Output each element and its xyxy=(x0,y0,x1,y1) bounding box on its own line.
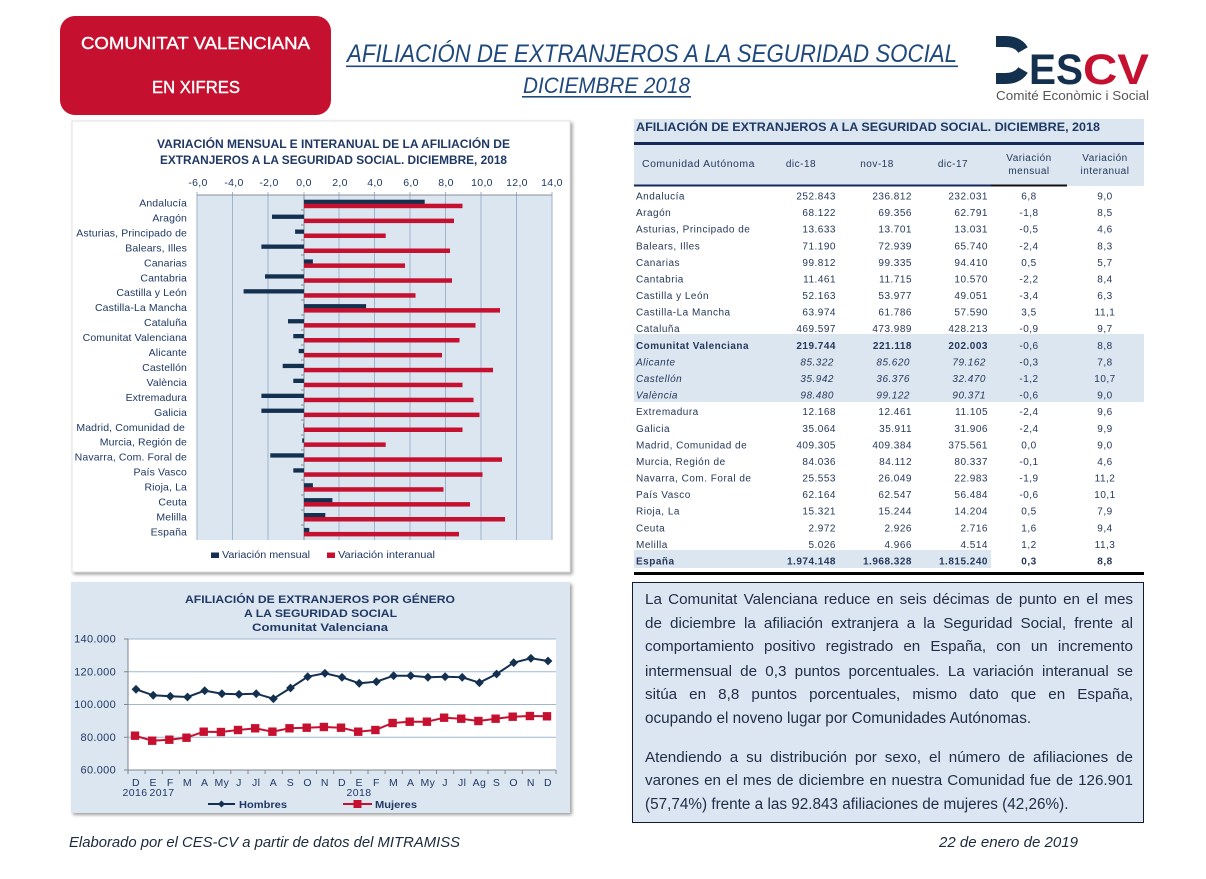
line chart x axis labels: J xyxy=(442,777,448,789)
badge: Comunitat Valenciana en xifres: EN XIFRES xyxy=(152,77,240,97)
bar chart legend: Variación mensual xyxy=(222,549,310,561)
table rows: Castilla-La Mancha xyxy=(636,308,731,319)
line chart x axis labels: F xyxy=(373,777,380,789)
line chart x axis labels: D xyxy=(544,777,552,789)
line chart x axis labels: J xyxy=(236,777,242,789)
table rows: 428.213 xyxy=(948,324,988,335)
table rows: Aragón xyxy=(636,208,671,219)
line chart x axis labels: 2016 xyxy=(123,787,147,799)
panel: bar chart of monthly and yearly variation xyxy=(72,121,570,572)
table rows: 13.633 xyxy=(802,225,836,236)
table rows: 62.547 xyxy=(878,490,912,501)
table rows: 1,2 xyxy=(1021,540,1037,551)
table rows: 65.740 xyxy=(954,241,988,252)
line chart x axis labels: Ag xyxy=(473,777,486,789)
table rows: 56.484 xyxy=(954,490,988,501)
bar chart plot area xyxy=(197,195,552,540)
table rows: 68.122 xyxy=(802,208,836,219)
bar chart category labels: Ceuta xyxy=(158,496,187,508)
table rows: -0,6 xyxy=(1019,490,1039,501)
table rows: 409.305 xyxy=(796,440,836,451)
line chart x axis labels: Jl xyxy=(252,777,260,789)
table rows: 1,6 xyxy=(1021,523,1037,534)
table rows: Ceuta xyxy=(636,523,665,534)
line chart x axis labels: O xyxy=(509,777,518,789)
table rows: 72.939 xyxy=(878,241,912,252)
line chart legend: Hombres xyxy=(239,800,287,811)
table rows: Cataluña xyxy=(636,324,680,335)
text box: commentary: (57,74%) frente a las 92.843 afiliaciones de mujeres (42,26%). xyxy=(645,796,1068,813)
table rows: Galicia xyxy=(636,424,670,435)
table rows: 6,8 xyxy=(1021,192,1037,202)
table rows: Andalucía xyxy=(636,192,685,202)
line: Hombres xyxy=(136,658,548,699)
bar chart category labels: Navarra, Com. Foral de xyxy=(75,452,187,464)
line chart title: Comunitat Valenciana xyxy=(252,622,389,634)
table rows: 10,7 xyxy=(1094,374,1116,385)
table title: AFILIACIÓN DE EXTRANJEROS A LA SEGURIDAD SOCIAL. DICIEMBRE, 2018 xyxy=(636,121,1101,134)
bar chart category labels: Castilla y León xyxy=(116,287,187,299)
line chart y axis labels: 120.000 xyxy=(74,666,116,678)
table header: Comunidad Autónoma xyxy=(642,159,755,170)
table rows: 4,6 xyxy=(1097,225,1113,236)
table rows: 26.049 xyxy=(878,474,912,484)
bars: monthly variation xyxy=(244,200,425,532)
highlight band: Comunitat Valenciana and provinces xyxy=(634,334,1144,402)
badge: Comunitat Valenciana en xifres xyxy=(60,16,331,115)
table rows: 252.843 xyxy=(796,192,836,202)
bar chart x axis labels: -6,0 xyxy=(188,177,208,189)
line chart title: AFILIACIÓN DE EXTRANJEROS POR GÉNERO xyxy=(185,593,455,606)
bar chart category labels: Castellón xyxy=(142,362,187,374)
table rows: 236.812 xyxy=(872,192,912,202)
table rows: -0,6 xyxy=(1019,341,1039,352)
bar chart category labels: España xyxy=(151,526,187,538)
main title: AFILIACIÓN DE EXTRANJEROS A LA SEGURIDAD SOCIAL xyxy=(345,39,957,68)
table header: dic-17 xyxy=(938,159,968,170)
table rows: -0,3 xyxy=(1019,357,1039,368)
table rows: 15.321 xyxy=(802,507,836,518)
line chart y axis labels: 140.000 xyxy=(74,634,116,646)
table bottom rule xyxy=(634,572,1144,575)
bar chart legend: Variación interanual xyxy=(338,549,435,561)
line chart x axis labels: F xyxy=(167,777,174,789)
table rows: -2,2 xyxy=(1019,274,1039,286)
table rows: 9,0 xyxy=(1097,440,1113,451)
table rows: 2.926 xyxy=(884,523,912,534)
line chart x axis labels: S xyxy=(287,777,294,789)
bar chart x axis labels: 12,0 xyxy=(506,177,528,189)
bar chart category labels: Murcia, Región de xyxy=(100,437,187,449)
highlight band: España xyxy=(634,550,991,568)
table rows: -1,8 xyxy=(1019,208,1039,219)
bar chart title: EXTRANJEROS A LA SEGURIDAD SOCIAL. DICIEMBRE, 2018 xyxy=(160,155,508,167)
table rows: -0,1 xyxy=(1019,457,1039,468)
table rows: 12.461 xyxy=(878,407,912,418)
table header: mensual xyxy=(1008,166,1050,177)
table rows: 52.163 xyxy=(802,291,836,302)
table rows: 8,8 xyxy=(1097,341,1113,352)
table header: Variación xyxy=(1006,153,1052,164)
bar chart category labels: Extremadura xyxy=(126,392,187,404)
table rows: Melilla xyxy=(636,540,668,551)
table rows: 4.514 xyxy=(960,540,988,551)
bar chart x axis labels: -2,0 xyxy=(259,177,279,189)
text box: commentary: Atendiendo a su distribución por sexo, el número de afiliaciones de xyxy=(645,748,1133,766)
bar chart category labels: Balears, Illes xyxy=(125,242,187,254)
table rows: Alicante xyxy=(635,357,676,368)
bar chart category labels xyxy=(75,198,187,538)
text box: commentary xyxy=(632,582,1144,823)
table rows: 11.105 xyxy=(955,407,988,418)
main title: DICIEMBRE 2018 xyxy=(523,73,691,98)
table header: interanual xyxy=(1081,166,1129,177)
table rows: 53.977 xyxy=(878,291,912,302)
table rows: 36.376 xyxy=(876,374,910,385)
bars: yearly variation xyxy=(304,204,505,536)
table rows: 22.983 xyxy=(954,474,988,484)
table rows: 8,8 xyxy=(1097,556,1113,568)
table rows: Cantabria xyxy=(636,274,684,286)
line chart title xyxy=(185,593,455,634)
table rows: 9,9 xyxy=(1097,424,1113,435)
table rows: 11,1 xyxy=(1095,308,1115,319)
table rows: 10.570 xyxy=(954,274,988,286)
table rows: 9,7 xyxy=(1097,324,1113,335)
line chart y axis labels: 60.000 xyxy=(81,764,116,776)
table rows: 62.791 xyxy=(954,208,988,219)
table header: Variación xyxy=(1082,153,1128,164)
table rows: 9,0 xyxy=(1097,391,1113,402)
table rows: 35.942 xyxy=(800,374,834,385)
table rows: Castilla y León xyxy=(636,291,709,302)
table rows: 63.974 xyxy=(802,308,836,319)
logo: CES-CV: ES xyxy=(1029,46,1083,94)
line chart x axis labels: N xyxy=(321,777,329,789)
table rows: España xyxy=(636,556,675,568)
bar chart x axis labels: -4,0 xyxy=(224,177,244,189)
table rows: 0,5 xyxy=(1021,507,1037,518)
line chart legend: Mujeres xyxy=(375,800,417,811)
table rows: 1.968.328 xyxy=(863,556,912,568)
bar chart x axis labels: 6,0 xyxy=(403,177,419,189)
table rows: 94.410 xyxy=(954,258,988,269)
footer: date: 22 de enero de 2019 xyxy=(938,835,1078,851)
table rows: 219.744 xyxy=(796,341,836,352)
table rows: 69.356 xyxy=(878,208,912,219)
line chart y axis labels: 100.000 xyxy=(74,699,116,711)
table rows: 79.162 xyxy=(952,357,986,368)
line chart x axis labels: E xyxy=(149,777,157,789)
bar chart category labels: Melilla xyxy=(156,512,187,524)
bar chart category labels: Madrid, Comunidad de xyxy=(76,422,185,434)
table rows: Castellón xyxy=(636,374,682,385)
line chart x axis labels: D xyxy=(338,777,346,789)
bar chart x axis labels: 14,0 xyxy=(541,177,563,189)
table rows: 10,1 xyxy=(1094,490,1116,501)
table rows: 6,3 xyxy=(1097,291,1113,302)
table rows: 469.597 xyxy=(796,324,836,335)
table rows: 1.815.240 xyxy=(939,556,988,568)
table rows: -3,4 xyxy=(1019,291,1039,302)
line chart x axis labels: M xyxy=(183,777,192,789)
table title xyxy=(634,119,1144,142)
table rows: 0,3 xyxy=(1021,556,1037,568)
bar chart category labels: País Vasco xyxy=(133,467,187,479)
table rows: 11,3 xyxy=(1095,540,1115,551)
main title xyxy=(345,39,958,98)
bar chart category labels: Cantabria xyxy=(140,272,187,284)
table rows: 99.335 xyxy=(878,258,912,269)
line: Mujeres xyxy=(135,716,547,741)
line chart legend xyxy=(208,800,417,811)
table rows: 375.561 xyxy=(948,440,988,451)
table rows: 84.112 xyxy=(879,457,912,468)
table rows: 7,9 xyxy=(1097,507,1113,518)
bar chart category labels: Andalucía xyxy=(139,198,187,210)
table rows: -0,9 xyxy=(1019,324,1039,335)
line chart x axis labels: 2017 xyxy=(150,787,174,799)
table rows: 98.480 xyxy=(800,391,834,402)
bar chart category labels: Aragón xyxy=(152,212,187,224)
table rows: Asturias, Principado de xyxy=(636,225,750,236)
table rows: Extremadura xyxy=(636,407,699,418)
table rows: Balears, Illes xyxy=(636,241,700,252)
table rows: 61.786 xyxy=(878,308,912,319)
line chart y axis labels xyxy=(74,634,116,776)
table rows: 8,5 xyxy=(1097,208,1113,219)
table rows: 14.204 xyxy=(954,507,988,518)
table rows: -2,4 xyxy=(1019,241,1039,252)
table rows: Canarias xyxy=(636,258,680,269)
table rows: 11,2 xyxy=(1095,474,1115,484)
bar chart category labels: València xyxy=(147,377,187,389)
logo: CES-CV xyxy=(996,42,1149,103)
table rows: València xyxy=(636,391,678,402)
bar chart category labels: Comunitat Valenciana xyxy=(83,332,187,344)
table rows: 9,0 xyxy=(1097,192,1113,202)
table header: dic-18 xyxy=(786,159,816,170)
table header xyxy=(634,142,1144,186)
line chart x axis labels: A xyxy=(270,777,277,789)
table rows: 99.122 xyxy=(876,391,910,402)
text box: commentary: sitúa en 8,8 puntos porcentuales, mismo dato que en España, xyxy=(645,686,1133,703)
bar chart x axis labels xyxy=(188,177,563,189)
table rows: 4,6 xyxy=(1097,457,1113,468)
text box: commentary: ocupando el noveno lugar por Comunidades Autónomas. xyxy=(645,710,1031,727)
bar chart x axis labels: 2,0 xyxy=(332,177,348,189)
line chart x axis labels: My xyxy=(421,777,436,789)
line chart y axis labels: 80.000 xyxy=(81,732,116,744)
line chart x axis labels xyxy=(123,777,552,799)
table rows: 0,0 xyxy=(1021,440,1037,451)
table rows: 5.026 xyxy=(808,540,836,551)
table rows: 473.989 xyxy=(872,324,912,335)
bar chart category labels: Asturias, Principado de xyxy=(76,227,187,239)
line chart x axis labels: A xyxy=(201,777,208,789)
table rows: Madrid, Comunidad de xyxy=(636,440,747,451)
bar chart legend xyxy=(211,549,435,561)
table rows: 8,3 xyxy=(1097,241,1113,252)
bar chart category labels: Cataluña xyxy=(144,317,187,329)
table rows: 13.031 xyxy=(954,225,988,236)
bar chart category labels: Galicia xyxy=(154,407,187,419)
line chart x axis labels: M xyxy=(389,777,398,789)
bar chart x axis labels: 4,0 xyxy=(367,177,383,189)
table rows: País Vasco xyxy=(636,490,691,501)
table rows: 90.371 xyxy=(952,391,986,402)
table rows: 57.590 xyxy=(954,308,988,319)
table rows: 202.003 xyxy=(948,341,988,352)
table rows: Murcia, Región de xyxy=(636,457,726,468)
logo: CES-CV: CV xyxy=(1083,46,1149,94)
bar chart category labels: Castilla-La Mancha xyxy=(95,302,187,314)
table rows: 15.244 xyxy=(878,507,912,518)
bar chart x axis labels: 10,0 xyxy=(471,177,493,189)
bar chart category labels: Alicante xyxy=(149,347,187,359)
table rows: 13.701 xyxy=(878,225,912,236)
bar chart x axis labels: 0,0 xyxy=(296,177,312,189)
table rows: 12.168 xyxy=(802,407,836,418)
logo: CES-CV: Comité Econòmic i Social xyxy=(996,88,1149,103)
table rows: 2.716 xyxy=(960,523,988,534)
table rows: 9,4 xyxy=(1097,523,1113,534)
table rows: 49.051 xyxy=(954,291,988,302)
line chart x axis labels: A xyxy=(407,777,414,789)
table rows: 62.164 xyxy=(802,490,836,501)
line chart title: A LA SEGURIDAD SOCIAL xyxy=(244,608,397,620)
table rows: 84.036 xyxy=(802,457,836,468)
text box: commentary: intermensual de 0,3 puntos porcentuales. La variación interanual se xyxy=(645,662,1133,680)
text box: commentary: de diciembre la afiliación extranjera a la Seguridad Social, frente al xyxy=(645,615,1133,632)
table rows: 35.911 xyxy=(879,424,912,435)
table rows: 71.190 xyxy=(802,241,836,252)
data table xyxy=(634,119,1144,575)
table rows: 9,6 xyxy=(1097,407,1113,418)
bar chart x axis labels: 8,0 xyxy=(438,177,454,189)
table rows: 232.031 xyxy=(948,192,988,202)
table rows: Rioja, La xyxy=(636,507,680,518)
table rows: 2.972 xyxy=(808,523,836,534)
footer: source note: Elaborado por el CES-CV a partir de datos del MITRAMISS xyxy=(69,835,460,851)
table header: nov-18 xyxy=(860,159,894,170)
line chart x axis labels: 2018 xyxy=(347,787,371,799)
table rows: 8,4 xyxy=(1097,274,1113,286)
text box: commentary: comportamiento positivo registrado en España, con un incremento xyxy=(645,638,1133,655)
bar chart category labels: Canarias xyxy=(144,257,187,269)
table rows: -1,2 xyxy=(1019,374,1039,385)
bar chart title xyxy=(157,138,510,167)
table rows: 85.620 xyxy=(876,357,910,368)
table rows: 1.974.148 xyxy=(787,556,836,568)
table rows: 99.812 xyxy=(802,258,836,269)
table rows: -2,4 xyxy=(1019,424,1039,435)
table rows: 221.118 xyxy=(873,341,912,352)
table rows: -0,6 xyxy=(1019,391,1039,402)
badge: Comunitat Valenciana en xifres: COMUNITAT VALENCIANA xyxy=(81,33,310,53)
line chart x axis labels: My xyxy=(215,777,230,789)
table rows: Navarra, Com. Foral de xyxy=(636,474,751,484)
table rows: 31.906 xyxy=(954,424,988,435)
table rows: 32.470 xyxy=(952,374,986,385)
panel: line chart of affiliation by gender xyxy=(71,582,570,813)
table rows xyxy=(635,192,1116,568)
line chart x axis labels: Jl xyxy=(458,777,466,789)
line chart x axis labels: S xyxy=(493,777,500,789)
table rows: 35.064 xyxy=(802,424,836,435)
text box: commentary: varones en el mes de diciembre en nuestra Comunidad fue de 126.901 xyxy=(645,772,1133,788)
table rows: 85.322 xyxy=(800,357,834,368)
table rows: 3,5 xyxy=(1021,308,1037,319)
table rows: 11.461 xyxy=(803,274,836,286)
table rows: Comunitat Valenciana xyxy=(636,341,749,352)
table rows: 0,5 xyxy=(1021,258,1037,269)
table rows: -1,9 xyxy=(1019,474,1039,484)
bar chart category labels: Rioja, La xyxy=(144,482,187,494)
table rows: -0,5 xyxy=(1019,225,1039,236)
text box: commentary: La Comunitat Valenciana reduce en seis décimas de punto en el mes xyxy=(645,590,1133,608)
table rows: 5,7 xyxy=(1097,258,1113,269)
table rows: 4.966 xyxy=(884,540,912,551)
table rows: -2,4 xyxy=(1019,407,1039,418)
table rows: 11.715 xyxy=(879,274,912,286)
line chart x axis labels: N xyxy=(527,777,535,789)
line chart x axis labels: O xyxy=(303,777,312,789)
table rows: 409.384 xyxy=(872,440,912,451)
line chart plot area xyxy=(128,639,556,770)
table rows: 7,8 xyxy=(1097,357,1113,368)
bar chart title: VARIACIÓN MENSUAL E INTERANUAL DE LA AFILIACIÓN DE xyxy=(157,138,510,151)
table rows: 80.337 xyxy=(954,457,988,468)
line chart x axis labels: E xyxy=(355,777,363,789)
table rows: 25.553 xyxy=(802,474,836,484)
line chart x axis labels: D xyxy=(132,777,140,789)
